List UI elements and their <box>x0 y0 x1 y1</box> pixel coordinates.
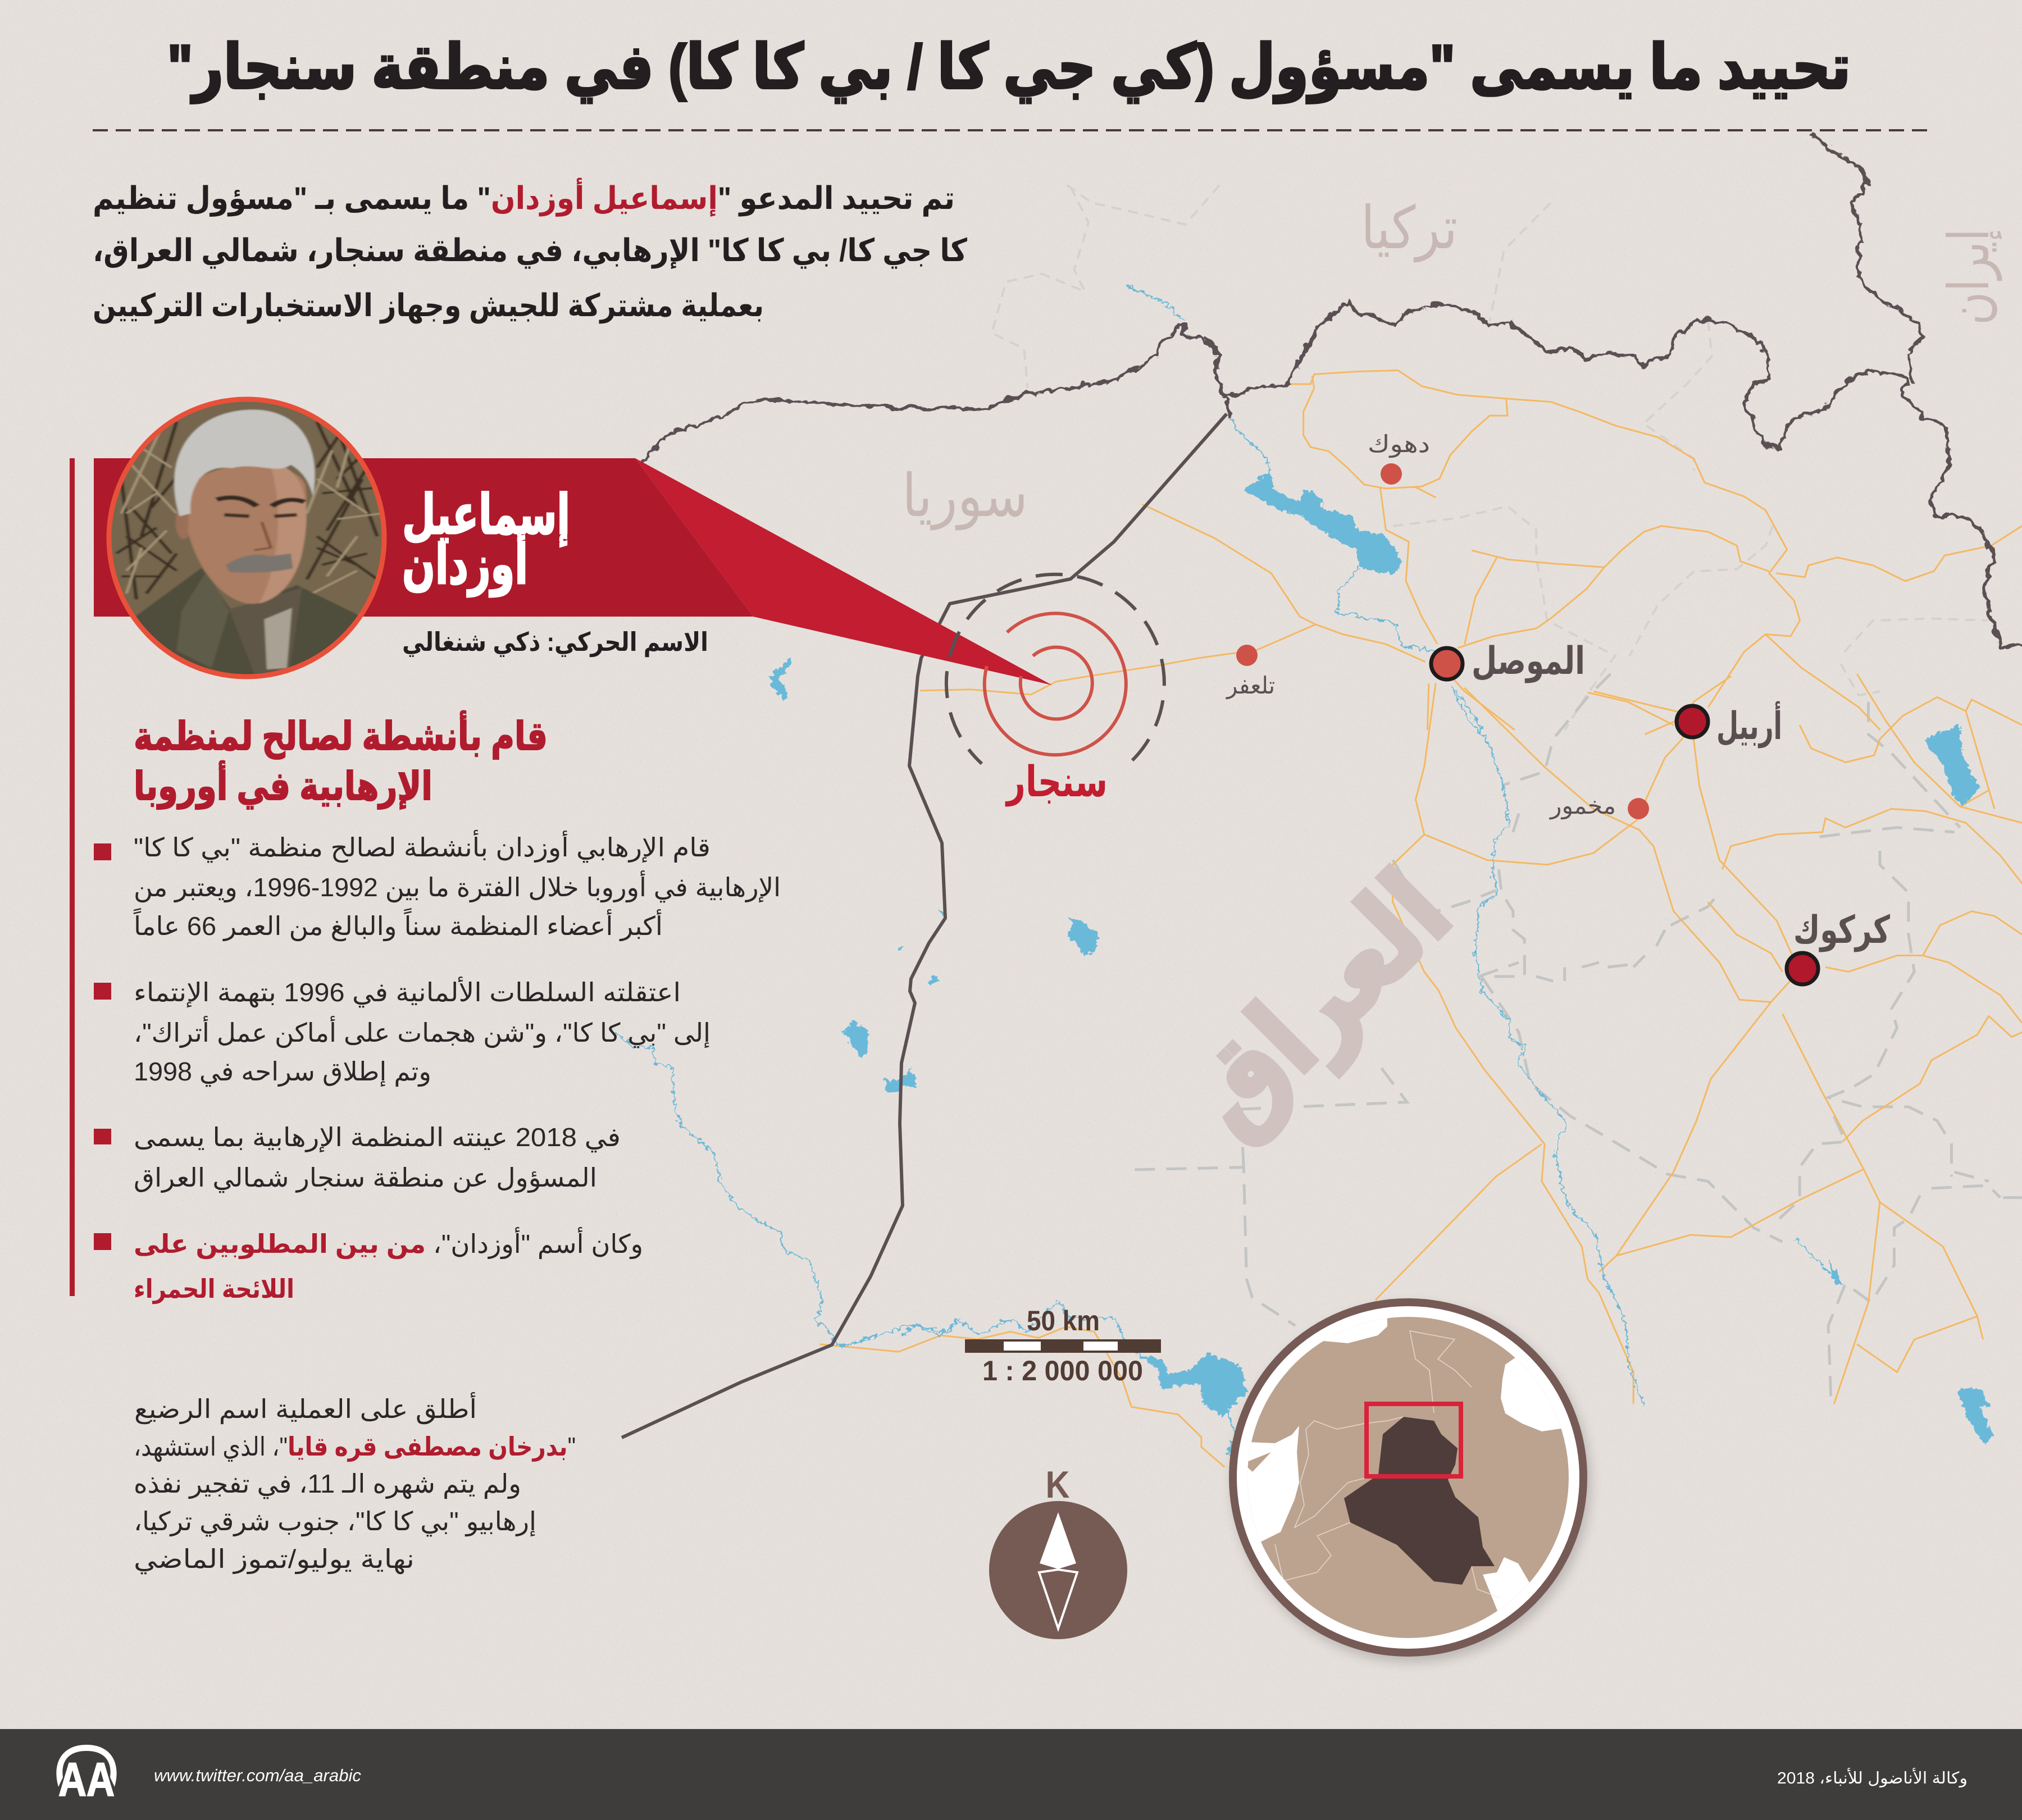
map: base layers <box>608 130 2022 1467</box>
city: Makhmour: مخمور <box>1549 792 1616 819</box>
bullet 3: في 2018 عينته المنظمة الإرهابية بما يسمى <box>134 1123 621 1153</box>
intro text: بعملية مشتركة للجيش وجهاز الاستخبارات التركيين <box>93 288 764 324</box>
footer bar <box>0 1729 2022 1820</box>
bullet 3: المسؤول عن منطقة سنجار شمالي العراق <box>134 1163 597 1193</box>
vertical red rule <box>70 458 75 1296</box>
map: gray dashed provincial lines north <box>992 183 1988 730</box>
heading: activities: الإرهابية في أوروبا <box>134 760 432 810</box>
bullet 4 <box>94 1227 643 1304</box>
bullet 4: وكان أسم "أوزدان"، من بين المطلوبين على <box>134 1227 643 1260</box>
seas <box>1247 1319 1561 1611</box>
city: Erbil <box>1677 701 1782 749</box>
bullet 2 <box>94 976 711 1087</box>
intro text: كا جي كا/ بي كا كا" الإرهابي، في منطقة سنجار، شمالي العراق، <box>93 232 967 269</box>
map: country borders <box>622 130 2022 1438</box>
city: Duhok <box>1368 431 1430 485</box>
label: Syria: سوريا <box>902 463 1028 531</box>
footer logo: AA: AA <box>58 1753 115 1806</box>
heading: activities: قام بأنشطة لصالح لمنظمة <box>134 710 548 760</box>
title dashed rule <box>93 129 1928 131</box>
map: roads north <box>920 370 2022 730</box>
Iraq silhouette <box>1344 1417 1495 1585</box>
operation note: "بدرخان مصطفى قره قايا"، الذي استشهد، <box>134 1432 576 1462</box>
watermark: Iraq name: العراق <box>1164 849 1475 1160</box>
city: Sinjar label: سنجار <box>1005 758 1108 807</box>
bullet 3 <box>94 1123 621 1193</box>
city: Makhmour <box>1549 792 1649 819</box>
map: roads southwest <box>819 1326 1224 1467</box>
scale bar <box>965 1305 1161 1386</box>
bullet 2: اعتقلته السلطات الألمانية في 1996 بتهمة الإنتماء <box>134 976 681 1008</box>
photo: Ismail Ozdan portrait <box>101 393 402 679</box>
intro text <box>93 177 967 324</box>
scale bar: 1 : 2 000 000 <box>982 1355 1143 1386</box>
operation note: إرهابيو "بي كا كا"، جنوب شرقي تركيا، <box>134 1507 536 1537</box>
scale bar: 50 km <box>1027 1305 1100 1337</box>
banner name <box>402 483 570 597</box>
callout: red name banner <box>94 458 1052 685</box>
bullet 1: أكبر أعضاء المنظمة سناً والبالغ من العمر 66 عاماً <box>133 908 663 942</box>
compass: K <box>1046 1463 1069 1506</box>
map: gray dashed provincial lines south <box>1135 674 2022 1404</box>
map: rivers <box>608 284 1840 1457</box>
footer url: www.twitter.com/aa_arabic <box>154 1766 361 1785</box>
city: Mosul <box>1431 640 1585 683</box>
bullet 2: إلى "بي كا كا"، و"شن هجمات على أماكن عمل أتراك"، <box>134 1016 711 1048</box>
marker: Sinjar rings <box>946 574 1164 764</box>
locator rectangle <box>1367 1404 1461 1476</box>
inset locator globe <box>1233 1292 1584 1653</box>
banner name: أوزدان <box>402 528 528 597</box>
banner name: إسماعيل <box>402 483 570 547</box>
city: Duhok: دهوك <box>1368 431 1430 458</box>
city: Kirkuk: كركوك <box>1793 909 1890 952</box>
city: Erbil: أربيل <box>1716 701 1782 749</box>
compass <box>989 1463 1127 1639</box>
city: Kirkuk <box>1787 909 1890 984</box>
bullet 1: الإرهابية في أوروبا خلال الفترة ما بين 1992-1996، ويعتبر من <box>134 870 781 903</box>
operation note: نهاية يوليو/تموز الماضي <box>134 1544 415 1575</box>
map: lakes <box>769 469 1991 1443</box>
heading: activities <box>134 710 548 810</box>
footer credit: وكالة الأناضول للأنباء، 2018 <box>1777 1767 1968 1787</box>
label: Turkey: تركيا <box>1361 195 1458 263</box>
city: Tal Afar: تلعفر <box>1226 672 1275 699</box>
operation note: أطلق على العملية اسم الرضيع <box>134 1392 477 1425</box>
bullet 1: قام الإرهابي أوزدان بأنشطة لصالح منظمة "بي كا كا" <box>134 829 711 863</box>
label: Iran: إيران <box>1938 229 2002 325</box>
operation note <box>134 1392 576 1575</box>
map: roads south <box>1376 674 2022 1404</box>
bullet 1 <box>94 829 781 942</box>
bullet 2: وتم إطلاق سراحه في 1998 <box>134 1057 431 1087</box>
city: Mosul: الموصل <box>1472 640 1585 683</box>
operation note: ولم يتم شهره الـ 11، في تفجير نفذه <box>134 1469 521 1499</box>
bullet 4: اللائحة الحمراء <box>134 1274 294 1304</box>
code name caption: الاسم الحركي: ذكي شنغالي <box>402 627 708 657</box>
city: Tal Afar <box>1226 645 1275 699</box>
intro text: تم تحييد المدعو "إسماعيل أوزدان" ما يسمى بـ "مسؤول تنظيم <box>93 177 955 217</box>
